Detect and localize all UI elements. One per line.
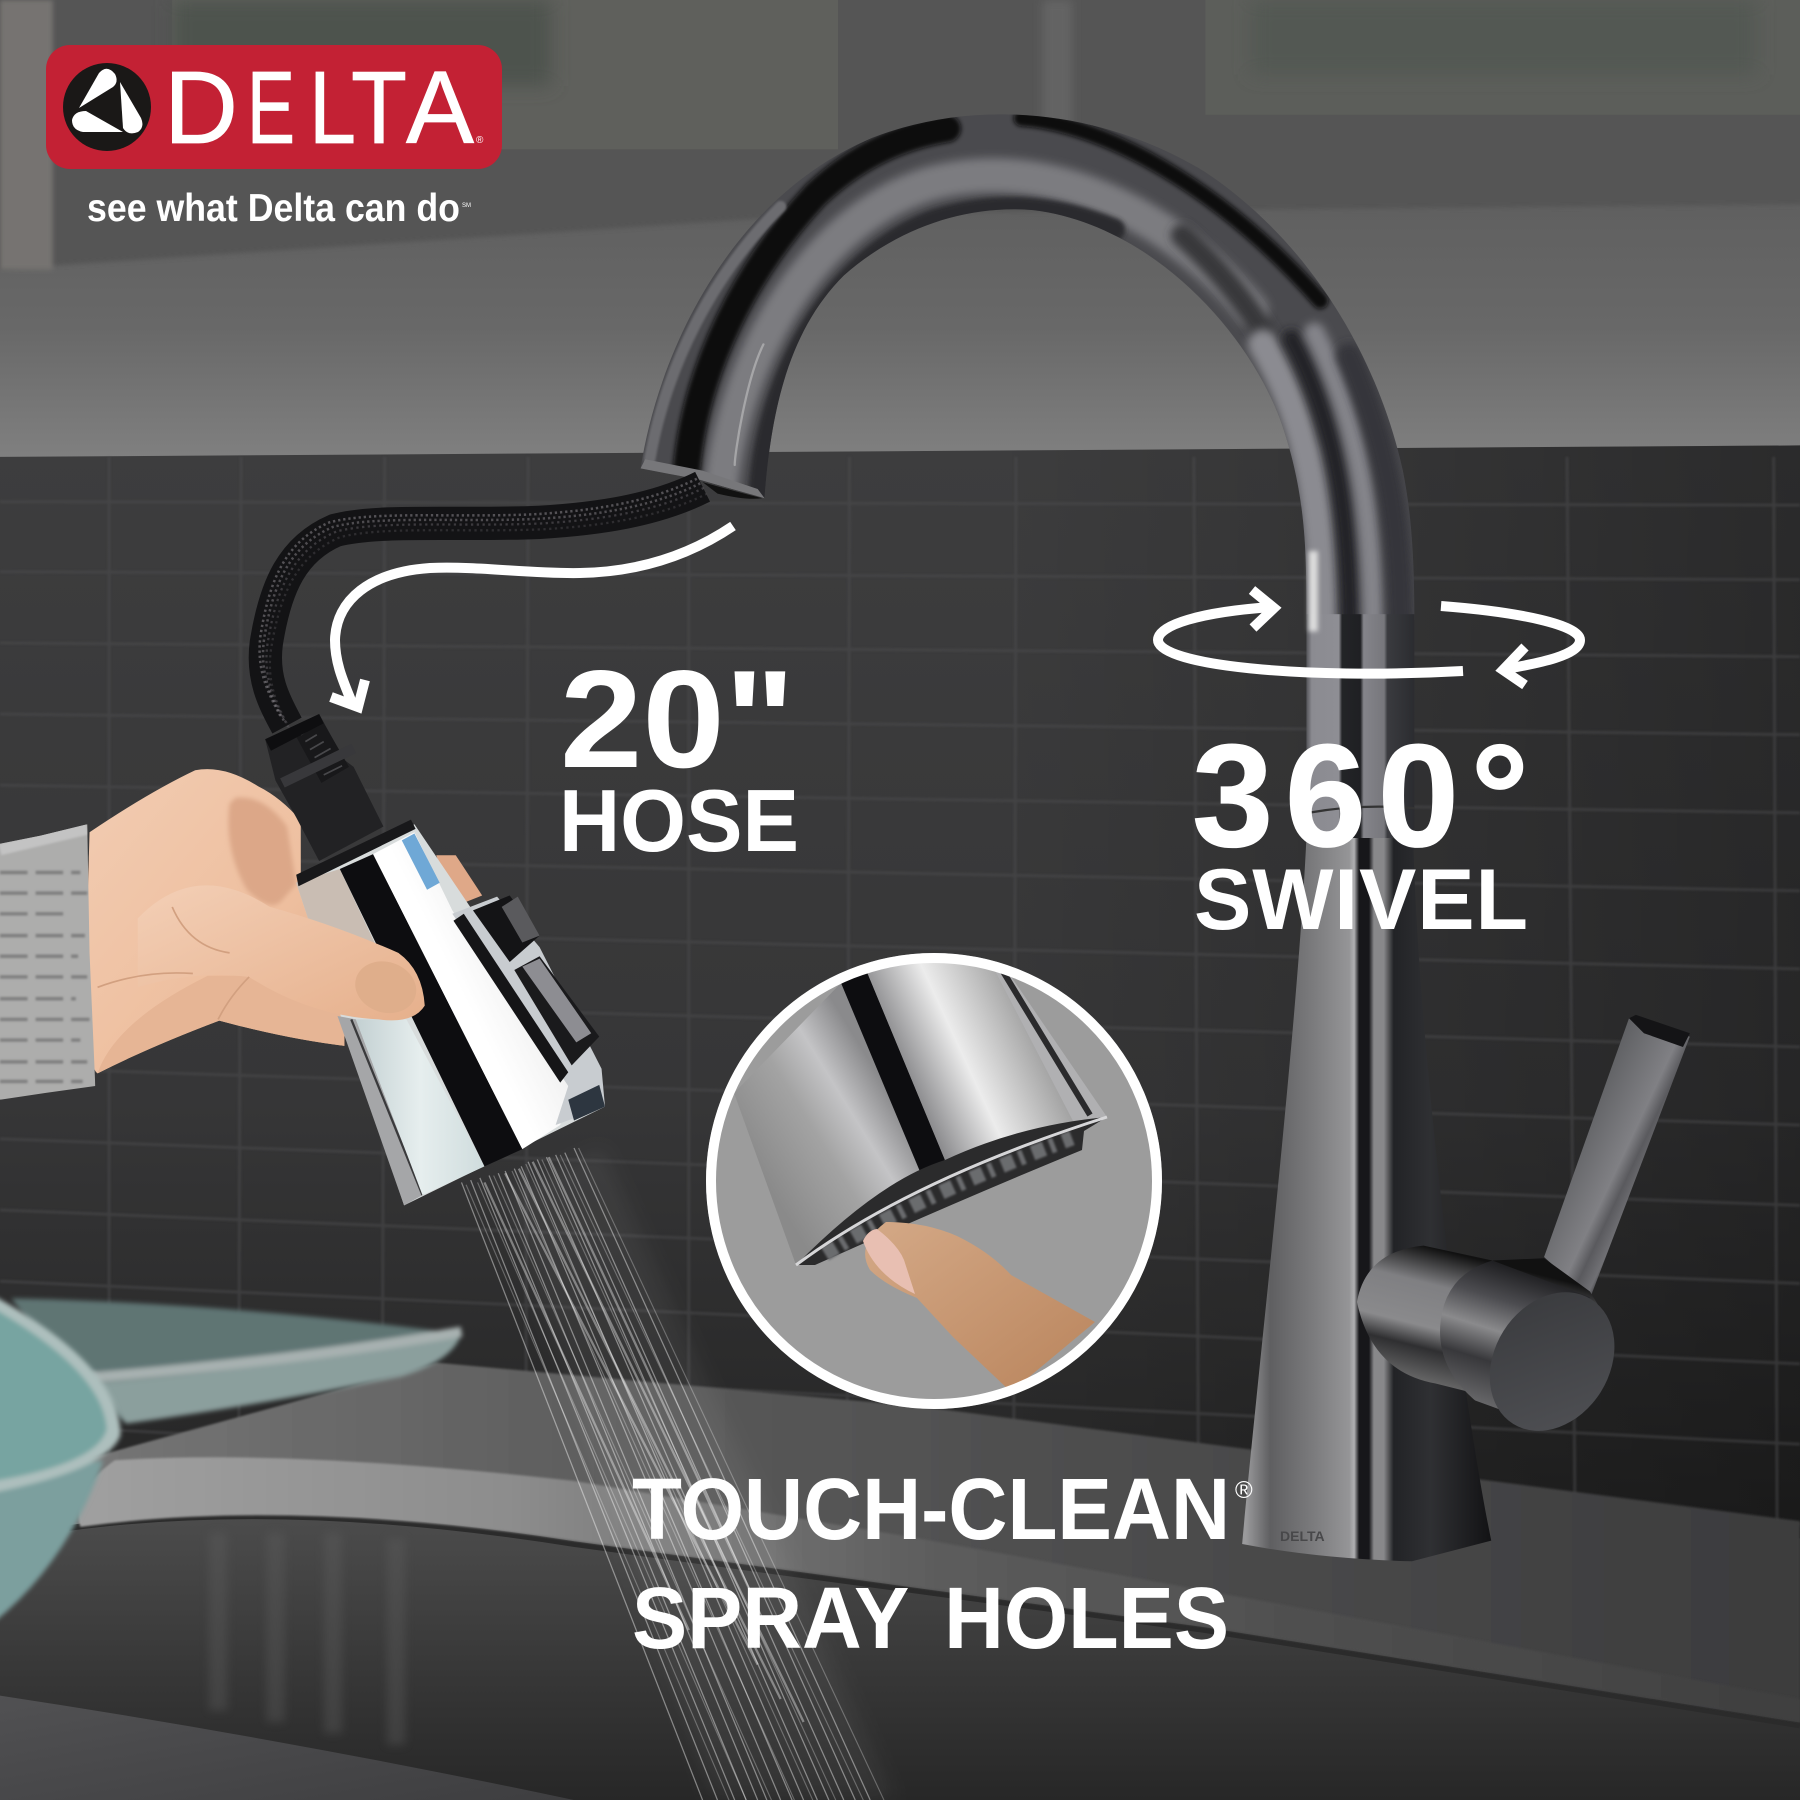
heading: touch-clean spray holes: TOUCH-CLEAN — [632, 1461, 1230, 1558]
inset: touch-clean spray head — [706, 950, 1162, 1409]
sweater sleeve — [0, 821, 103, 1102]
heading: 20 inch hose: HOSE — [559, 771, 799, 870]
icon: swivel arrows — [1158, 590, 1580, 685]
faucet handle — [1357, 1015, 1690, 1454]
sink basin — [0, 1516, 1800, 1800]
logo wordmark: L — [309, 50, 356, 165]
water spray — [461, 1148, 895, 1800]
heading: touch-clean spray holes: ® — [1235, 1477, 1253, 1504]
callout: hose arrow — [331, 526, 733, 707]
logo wordmark: T — [351, 50, 407, 165]
logo wordmark: D — [164, 50, 238, 165]
faucet spout — [641, 114, 1414, 643]
registered mark: ® — [476, 135, 484, 146]
teal bowl — [0, 1296, 121, 1622]
thumb in front of sprayer — [98, 885, 425, 1021]
countertop — [69, 1363, 1800, 1733]
heading: 360 degree swivel — [1192, 714, 1529, 948]
icon: Delta triangle — [63, 63, 151, 151]
heading: 360 degree swivel: SWIVEL — [1194, 852, 1528, 948]
logo wordmark: A — [406, 50, 474, 165]
logo wordmark — [164, 50, 474, 165]
logo wordmark: E — [247, 50, 295, 165]
counter front edge — [78, 1457, 1800, 1722]
heading: 20 inch hose — [559, 642, 799, 870]
plate — [11, 1298, 461, 1424]
heading: 360 degree swivel: 360° — [1192, 714, 1529, 877]
faucet column and base — [1242, 551, 1491, 1561]
foreground counter — [0, 1696, 574, 1800]
pull-down sprayer head — [265, 714, 605, 1205]
tagline: SM — [462, 203, 471, 209]
braided hose — [260, 479, 707, 732]
tagline: see what Delta can do — [87, 187, 460, 230]
logo: Delta — [46, 45, 502, 169]
heading: touch-clean spray holes: SPRAY HOLES — [632, 1570, 1229, 1667]
heading: touch-clean spray holes — [632, 1461, 1253, 1667]
faucet base brand mark: DELTA — [1280, 1528, 1325, 1544]
hand behind sprayer — [86, 769, 482, 1073]
background wall — [0, 0, 1800, 459]
tile backsplash — [0, 445, 1800, 1538]
heading: 20 inch hose: 20" — [560, 642, 795, 797]
